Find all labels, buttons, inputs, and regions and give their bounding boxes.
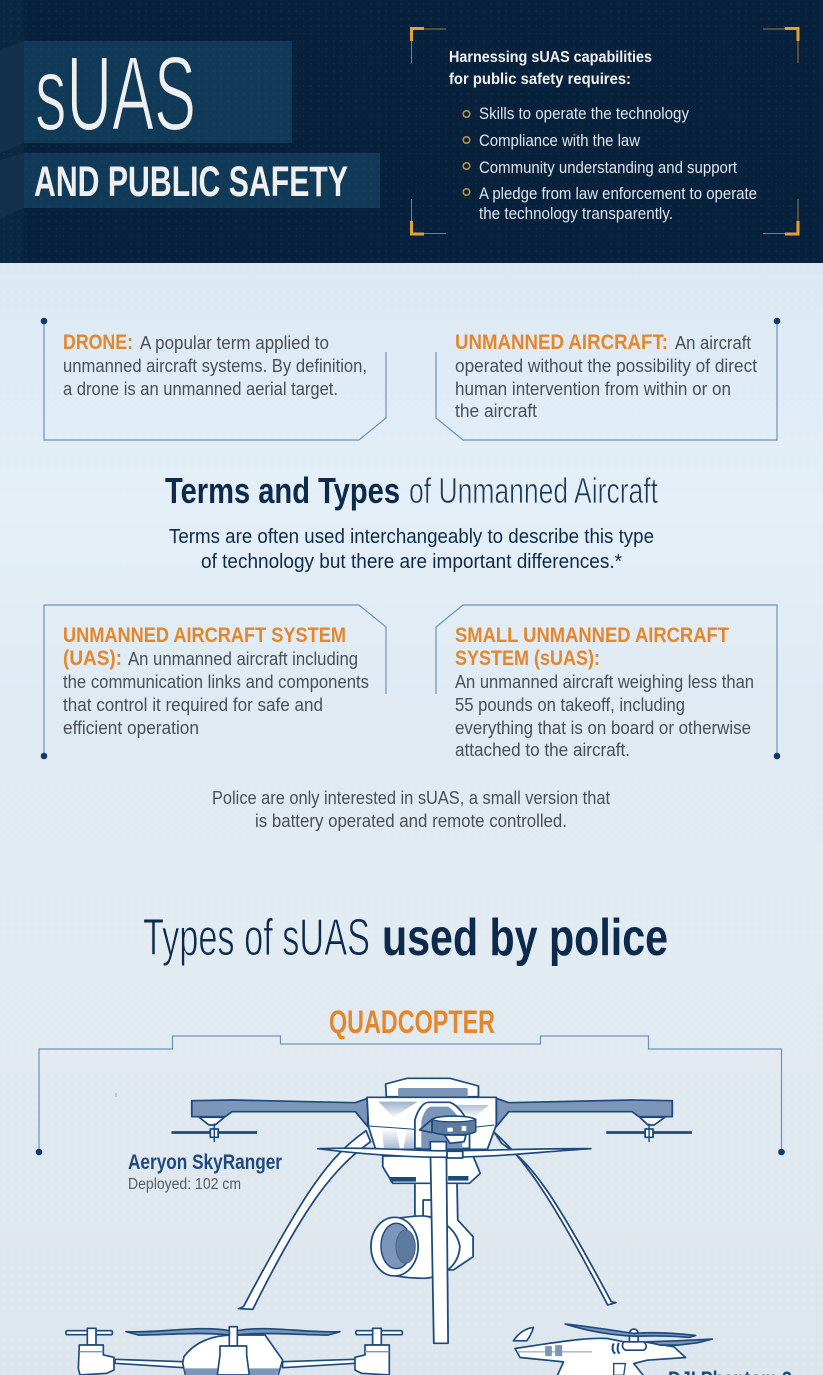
panel: sUAS definition: SMALL UNMANNED AIRCRAFT (455, 624, 729, 647)
panel: UAS definition: (UAS): (63, 647, 122, 670)
requirements text (449, 49, 757, 223)
requirements text: Compliance with the law (479, 132, 640, 150)
icon: small folding quadcopter (66, 1327, 402, 1375)
panel: UAS definition: the communication links and components (63, 672, 369, 692)
icon part: right rotor (355, 1328, 402, 1375)
icon part: main rotor blade (318, 1148, 591, 1157)
requirements text: Community understanding and support (479, 159, 737, 177)
panel: unmanned aircraft definition: the aircraft (455, 401, 537, 421)
heading: types of sUAS: used by police (382, 909, 668, 967)
title panel: and public safety (24, 153, 380, 208)
panel: unmanned aircraft definition: UNMANNED AIRCRAFT: (455, 331, 668, 354)
panel: UAS definition (41, 605, 386, 759)
title panel: and public safety: AND PUBLIC SAFETY (34, 158, 348, 206)
panel: UAS definition: An unmanned aircraft including (128, 649, 358, 669)
panel: UAS definition: efficient operation (63, 718, 199, 738)
drone label: Aeryon SkyRanger (128, 1151, 282, 1193)
heading: types of sUAS (143, 909, 668, 967)
panel: drone definition (41, 318, 386, 440)
panel: unmanned aircraft definition: operated without the possibility of direct (455, 356, 757, 376)
icon part: left rotor (66, 1328, 114, 1375)
heading: terms and types: of Unmanned Aircraft (409, 470, 658, 511)
requirements text: A pledge from law enforcement to operate (479, 185, 757, 203)
panel: drone definition: a drone is an unmanned aerial target. (63, 379, 338, 399)
heading: types of sUAS: Types of sUAS (143, 909, 370, 967)
panel: UAS definition: that control it required for safe and (63, 695, 323, 715)
icon part: center leg (430, 1142, 448, 1343)
drone label: Aeryon SkyRanger: Deployed: 102 cm (128, 1176, 241, 1193)
icon part: body (367, 1097, 496, 1149)
police note: is battery operated and remote controlled. (255, 811, 567, 831)
icon part: airframe (513, 1327, 686, 1375)
quadcopter bracket (36, 1036, 785, 1155)
drone label: Aeryon SkyRanger: Aeryon SkyRanger (128, 1151, 282, 1174)
panel: sUAS definition: everything that is on board or otherwise (455, 718, 751, 738)
requirements frame (412, 28, 798, 234)
icon part: rotors (565, 1324, 712, 1375)
icon part: gimbal and camera (371, 1156, 480, 1278)
panel: drone definition: unmanned aircraft systems. By definition, (63, 356, 367, 376)
requirements text: the technology transparently. (479, 205, 673, 223)
panel: sUAS definition: An unmanned aircraft weighing less than (455, 672, 754, 692)
panel: unmanned aircraft definition: An aircraft (675, 333, 751, 353)
requirements text: Skills to operate the technology (479, 105, 690, 123)
panel: drone definition: DRONE: (63, 331, 133, 354)
panel: sUAS definition: SYSTEM (sUAS): (455, 647, 600, 670)
panel: drone definition: A popular term applied to (140, 333, 329, 353)
panel: sUAS definition: 55 pounds on takeoff, including (455, 695, 685, 715)
police note (212, 788, 610, 831)
heading: terms and types: Terms and Types (165, 470, 400, 511)
panel: unmanned aircraft definition (436, 318, 780, 440)
requirements text: Harnessing sUAS capabilities (449, 49, 652, 66)
panel: sUAS definition: attached to the aircraft. (455, 740, 630, 760)
icon: DJI Phantom drone (513, 1324, 712, 1375)
intro text: of technology but there are important differences.* (201, 551, 622, 573)
icon part: legs (239, 1131, 616, 1309)
quadcopter label: QUADCOPTER (329, 1004, 495, 1040)
panel: sUAS definition (436, 605, 780, 760)
icon: Aeryon SkyRanger drone (171, 1078, 692, 1343)
panel: unmanned aircraft definition: human intervention from within or on (455, 379, 731, 399)
heading: terms and types (165, 470, 658, 511)
icon part: body (115, 1327, 355, 1375)
requirements text: for public safety requires: (449, 71, 631, 88)
intro text (169, 526, 654, 573)
icon part: top handle (386, 1078, 478, 1097)
title panel: sUAS: sUAS (35, 35, 196, 153)
police note: Police are only interested in sUAS, a small version that (212, 788, 610, 808)
icon part: arms (171, 1098, 692, 1142)
intro text: Terms are often used interchangeably to describe this type (169, 526, 654, 548)
panel: UAS definition: UNMANNED AIRCRAFT SYSTEM (63, 624, 346, 647)
header banner (0, 0, 823, 263)
